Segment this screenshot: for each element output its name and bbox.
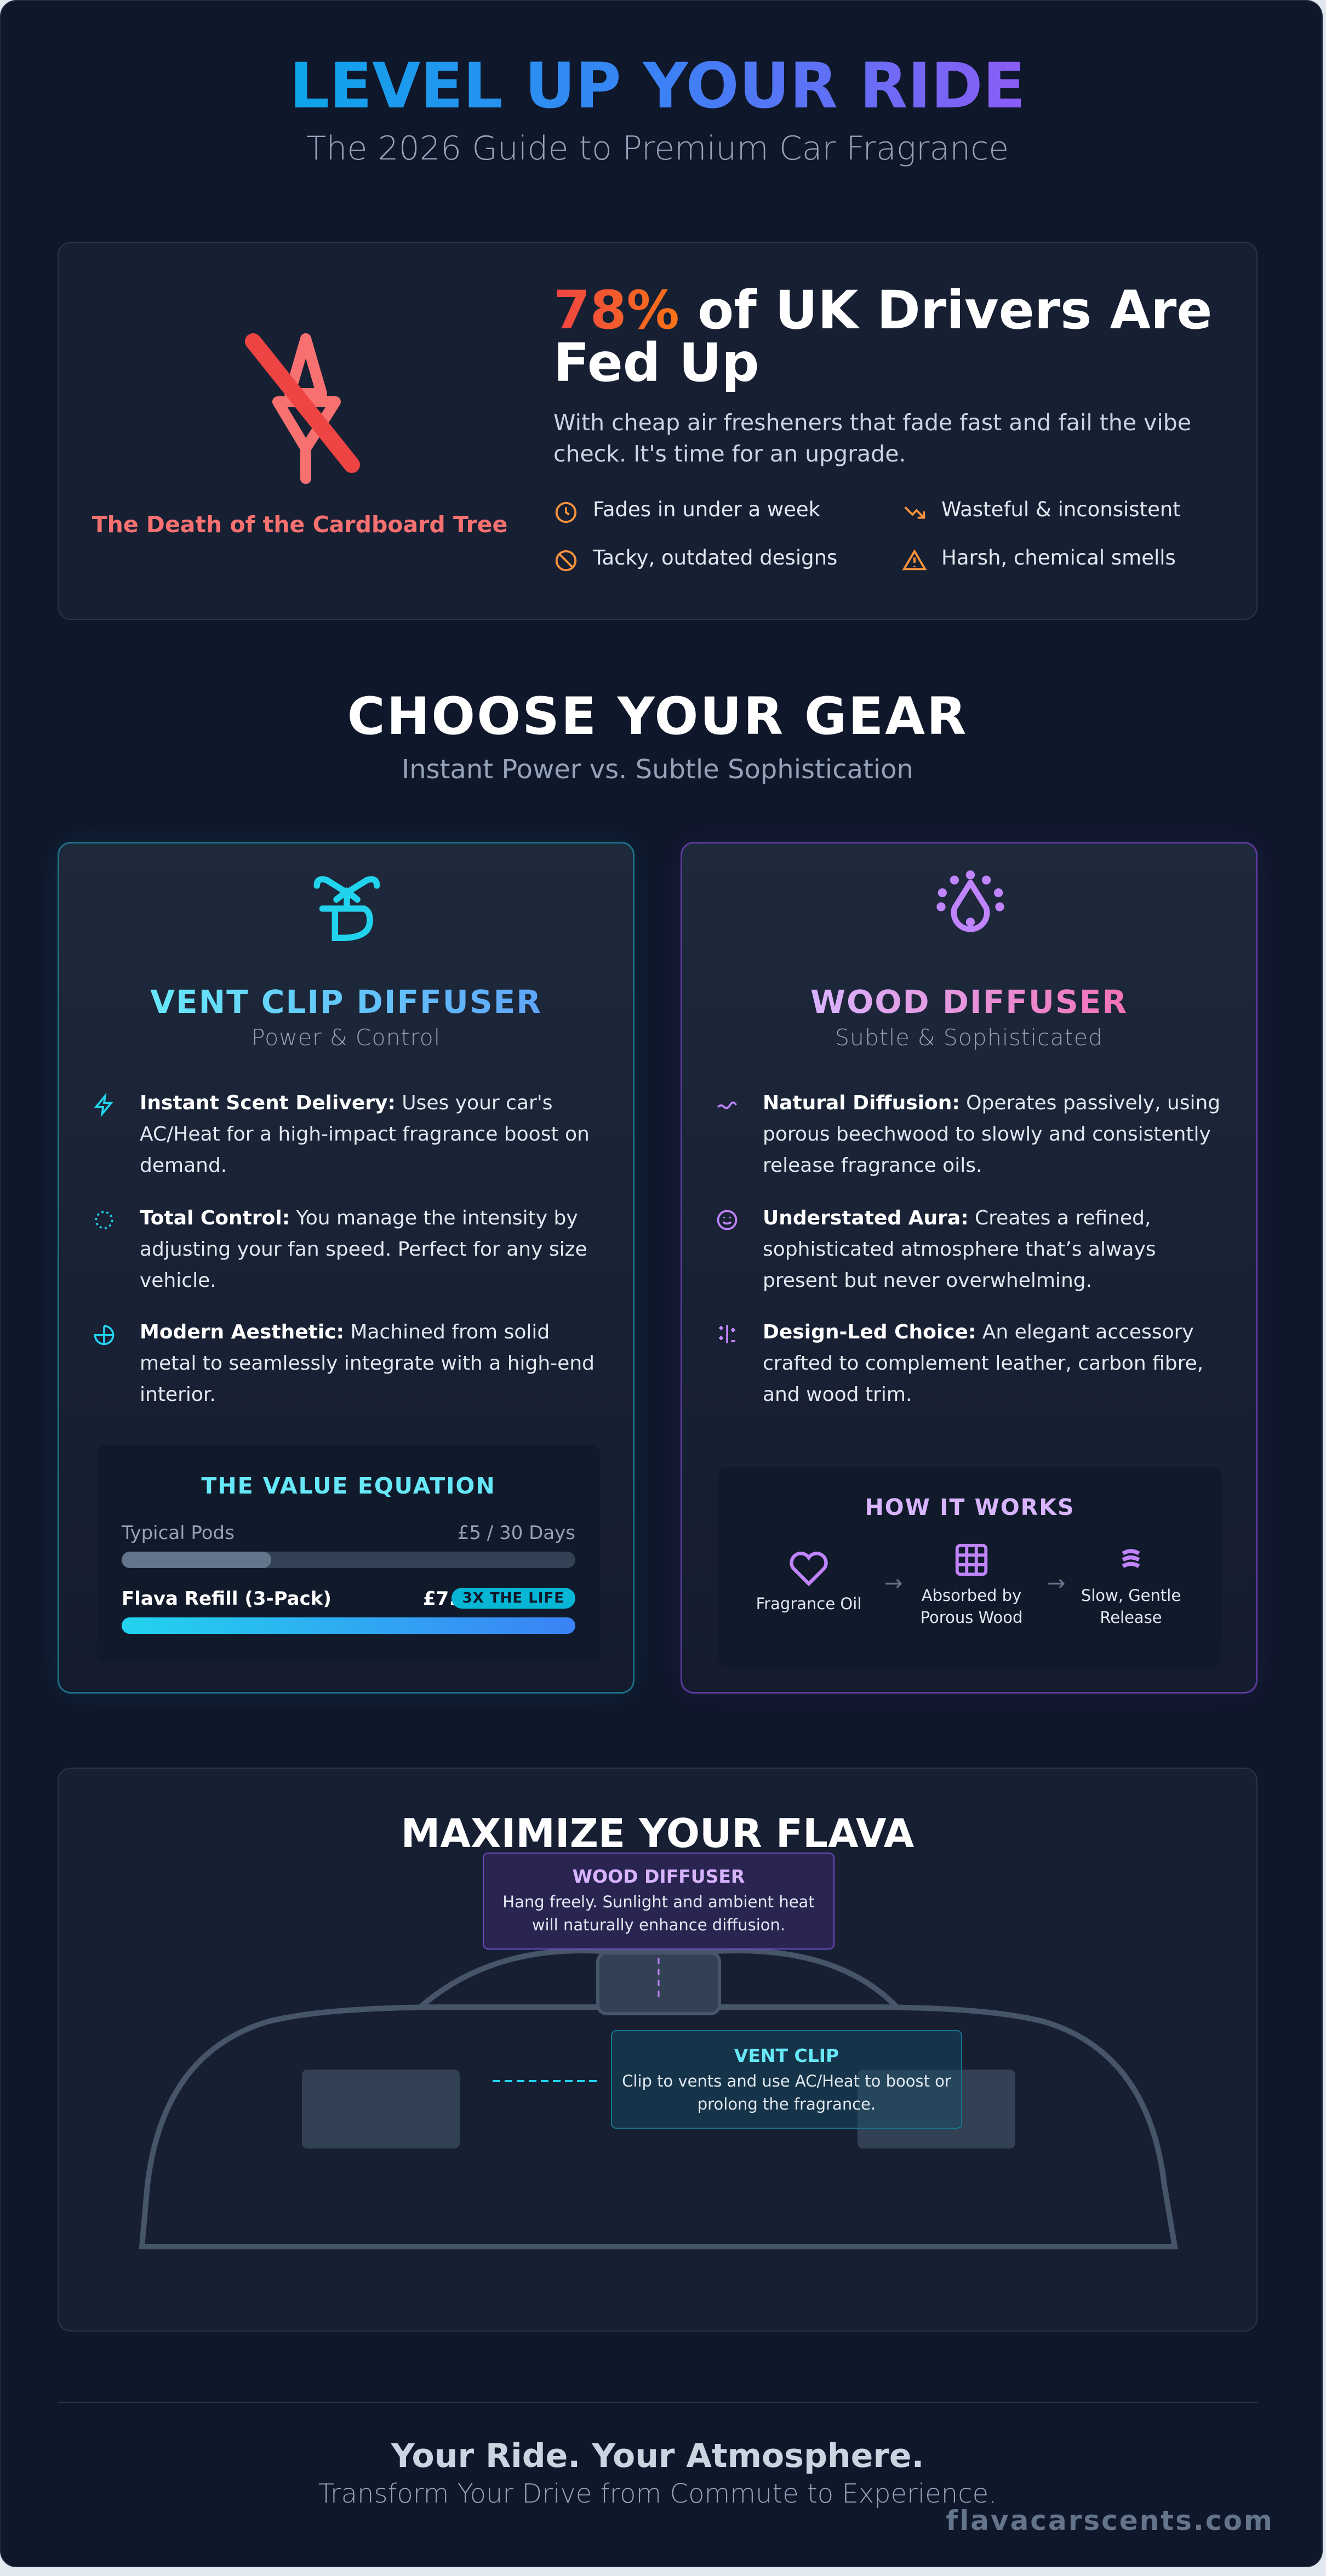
footer subtitle: Transform Your Drive from Commute to Experience. xyxy=(318,2478,997,2509)
icon caption: The Death of the Cardboard Tree xyxy=(92,511,507,538)
feature: instant scent: Instant Scent Delivery: Uses your car's AC/Heat for a high-impact fragrance boost on demand. xyxy=(140,1092,590,1177)
card subtitle: Subtle & Sophisticated xyxy=(835,1024,1103,1051)
callout: vent clip: Clip to vents and use AC/Heat to boost or xyxy=(622,2072,951,2090)
footer url: flavacarscents.com xyxy=(946,2505,1274,2537)
step: absorbed xyxy=(921,1543,1022,1627)
bullet: harsh: Harsh, chemical smells xyxy=(941,546,1176,569)
feature: natural diffusion: Natural Diffusion: Operates passively, using porous beechwood to slowly and consistently release fragrance oils. xyxy=(763,1092,1220,1177)
heading: MAXIMIZE YOUR FLAVA xyxy=(401,1810,914,1856)
card title: WOOD DIFFUSER xyxy=(810,983,1128,1021)
flava refill row: Flava Refill (3-Pack) xyxy=(122,1588,332,1610)
how title: HOW IT WORKS xyxy=(865,1494,1075,1520)
panel: problem xyxy=(58,242,1258,620)
panel: vent clip diffuser xyxy=(58,842,635,1694)
typical pods row xyxy=(122,1522,575,1544)
bar: typical pods xyxy=(122,1552,575,1568)
callout: vent clip: VENT CLIP xyxy=(734,2045,839,2066)
car dashboard diagram xyxy=(139,1948,1178,2249)
bullet: wasteful: Wasteful & inconsistent xyxy=(941,498,1181,521)
arrow 2: → xyxy=(1047,1571,1066,1596)
arrow 1: → xyxy=(884,1571,903,1596)
how it works box xyxy=(718,1467,1221,1667)
step: fragrance oil xyxy=(756,1552,861,1613)
feature: understated aura: Understated Aura: Creates a refined, sophisticated atmosphere that’s always present but never overwhelming. xyxy=(763,1207,1156,1292)
step: fragrance oil: Fragrance Oil xyxy=(756,1594,861,1613)
panel: maximize your flava xyxy=(58,1768,1258,2332)
card title: VENT CLIP DIFFUSER xyxy=(150,983,542,1021)
card subtitle: Power & Control xyxy=(252,1024,441,1051)
feature: design-led: Design-Led Choice: An elegant accessory crafted to complement leather, carbon fibre, and wood trim. xyxy=(763,1321,1203,1406)
icon: drop with dots xyxy=(936,870,1004,932)
callout: wood diffuser: Hang freely. Sunlight and ambient heat xyxy=(502,1893,815,1911)
callout: wood diffuser: WOOD DIFFUSER xyxy=(573,1866,745,1887)
step: release: Slow, Gentle xyxy=(1081,1586,1181,1605)
icon: vent clip xyxy=(313,876,380,941)
callout: vent clip xyxy=(611,2030,962,2129)
title: LEVEL UP YOUR RIDE xyxy=(290,49,1025,122)
callout: wood diffuser xyxy=(483,1853,835,1950)
bar: flava refill xyxy=(122,1617,575,1634)
feature: total control: Total Control: You manage the intensity by adjusting your fan speed. Perfect for any size vehicle. xyxy=(140,1207,587,1292)
bullet list xyxy=(556,498,1181,571)
flava refill row: £7.99 xyxy=(423,1588,482,1610)
step: absorbed: Absorbed by xyxy=(922,1586,1021,1605)
step: release: Release xyxy=(1100,1608,1162,1627)
subtitle: The 2026 Guide to Premium Car Fragrance xyxy=(306,129,1009,168)
value equation box xyxy=(97,1445,600,1662)
flava refill row xyxy=(122,1588,575,1610)
badge: 3X THE LIFE xyxy=(462,1590,564,1606)
paragraph: With cheap air fresheners that fade fast and fail the vibe check. It's time for an upgrade. xyxy=(553,409,1191,467)
heading: stat: 78% of UK Drivers Are Fed Up xyxy=(553,280,1212,394)
feature: modern aesthetic: Modern Aesthetic: Machined from solid metal to seamlessly integrate with a high‑end interior. xyxy=(140,1321,595,1406)
callout: vent clip: prolong the fragrance. xyxy=(698,2095,876,2113)
bullet: fades: Fades in under a week xyxy=(593,498,820,521)
callout: wood diffuser: will naturally enhance diffusion. xyxy=(532,1916,785,1934)
badge xyxy=(451,1588,575,1609)
panel: wood diffuser xyxy=(681,842,1258,1694)
step: release xyxy=(1081,1549,1181,1627)
typical pods row: Typical Pods xyxy=(122,1522,235,1544)
step: absorbed: Porous Wood xyxy=(921,1608,1022,1627)
typical pods row: £5 / 30 Days xyxy=(458,1522,575,1544)
value title: THE VALUE EQUATION xyxy=(201,1473,496,1499)
vents xyxy=(302,2070,460,2148)
footer tagline: Your Ride. Your Atmosphere. xyxy=(391,2437,924,2475)
subheading: Instant Power vs. Subtle Sophistication xyxy=(402,754,913,785)
bullet: tacky: Tacky, outdated designs xyxy=(593,546,837,569)
icon: crossed-out tree xyxy=(245,333,360,484)
heading: choose your gear: CHOOSE YOUR GEAR xyxy=(347,687,968,746)
mirror xyxy=(598,1953,719,2014)
